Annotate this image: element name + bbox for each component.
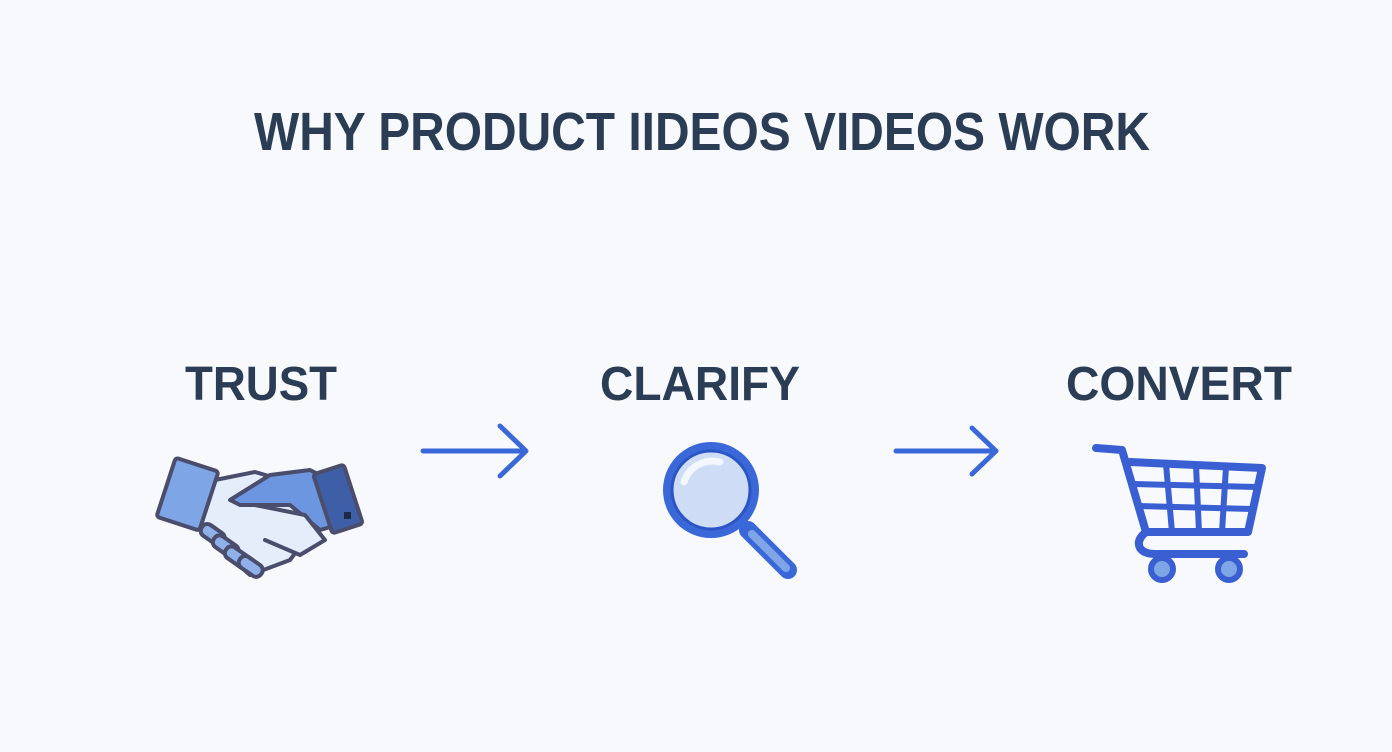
arrow 1 <box>423 426 526 476</box>
label: trust: TRUST <box>185 358 337 411</box>
arrow 2 <box>896 428 996 474</box>
title: WHY PRODUCT IIDEOS VIDEOS WORK <box>254 102 1150 162</box>
icon: shopping cart <box>1096 448 1262 580</box>
icon: handshake <box>156 458 363 579</box>
label: clarify: CLARIFY <box>600 358 800 411</box>
icon: magnifier <box>663 442 788 570</box>
label: convert: CONVERT <box>1066 358 1292 411</box>
